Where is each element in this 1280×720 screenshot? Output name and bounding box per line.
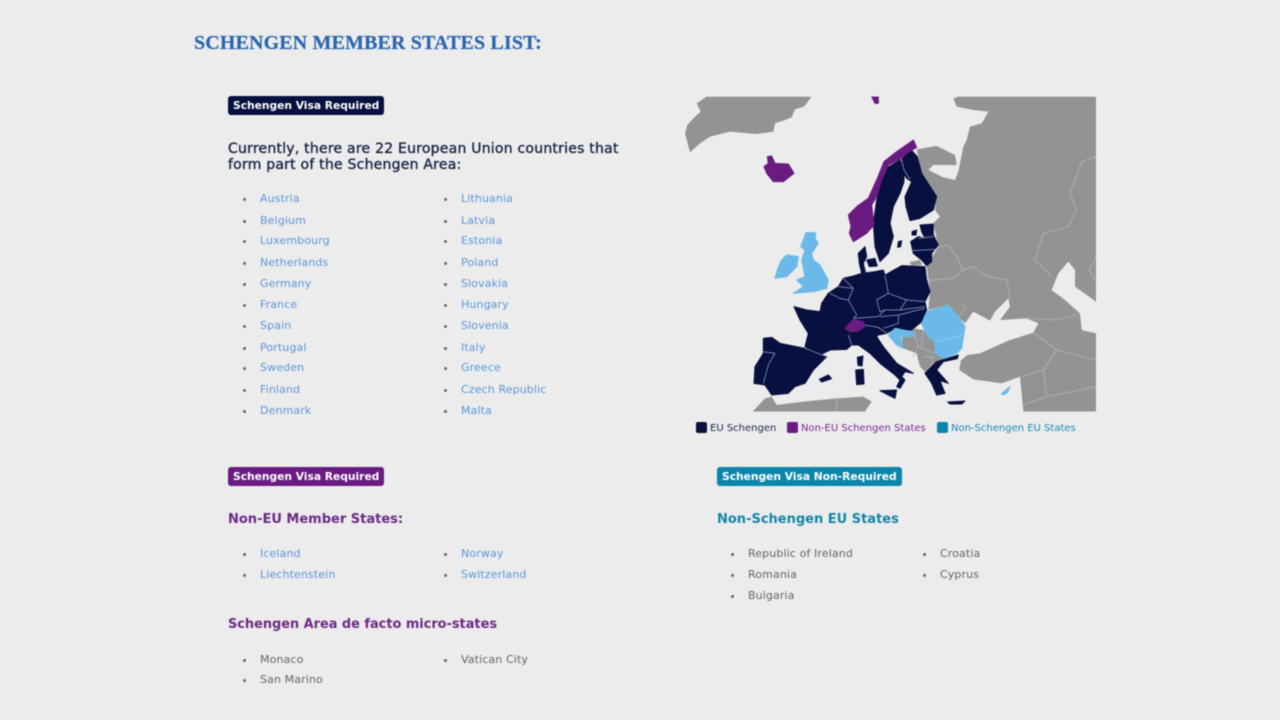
Iceland [764, 156, 794, 182]
Denmark [858, 247, 867, 273]
badge: Schengen Visa Non-Required [717, 467, 902, 486]
legend item: Non-Schengen EU States: Non-Schengen EU States [951, 422, 1076, 434]
heading: Non-EU Member States: Non-EU Member States: [228, 512, 403, 527]
list: second column of EU countries: Czech Republic [461, 382, 546, 396]
heading: 22 EU countries: Currently, there are 22 European Union countries that [228, 141, 619, 157]
Sardinia and Corsica [856, 356, 864, 385]
legend item: EU Schengen [695, 421, 776, 434]
Caspian Sea [1052, 262, 1096, 333]
Ireland [775, 255, 798, 278]
Baltic states [911, 224, 938, 266]
list: second column of EU countries: Latvia [461, 214, 495, 226]
list: first column micro-states: Monaco [260, 652, 303, 666]
list: first column micro-states: San Marino [260, 672, 323, 686]
list: first column micro-states [242, 652, 323, 686]
Sweden [873, 160, 904, 262]
list: second column of EU countries: Slovakia [461, 276, 508, 290]
EU Schengen countries [754, 149, 965, 404]
Finland [902, 149, 937, 221]
list: second column of EU countries: Malta [461, 404, 492, 416]
list: first column of EU countries: Finland [260, 382, 300, 396]
list: first column of EU countries: Luxembourg [260, 234, 330, 246]
Crete [948, 401, 965, 404]
list: second column micro-states: Vatican City [461, 652, 528, 666]
list: first column of EU countries: Sweden [260, 360, 304, 374]
list: second column non-Schengen: Cyprus [940, 568, 979, 580]
list: first column non-EU: Liechtenstein [260, 568, 335, 580]
list: first column non-Schengen: Bulgaria [748, 588, 795, 602]
list: second column of EU countries [444, 192, 546, 416]
list: first column of EU countries: Austria [260, 192, 300, 204]
legend [695, 421, 1076, 434]
grey land borders [837, 157, 1096, 412]
legend item: EU Schengen: EU Schengen [710, 422, 776, 434]
list: first column non-EU [242, 546, 336, 580]
list: first column of EU countries: Netherlands [260, 256, 328, 268]
Greece [925, 355, 958, 395]
legend item: Non-EU Schengen States: Non-EU Schengen States [801, 422, 926, 434]
Non-Schengen EU states [775, 233, 1010, 395]
list: first column non-Schengen: Republic of Ireland [748, 546, 853, 560]
list: first column of EU countries: Denmark [260, 404, 311, 416]
panel: Non-Schengen EU states [716, 466, 980, 602]
list: first column of EU countries: France [260, 298, 297, 310]
list: first column of EU countries [242, 192, 330, 416]
list: second column non-EU: Switzerland [461, 568, 526, 580]
panel: EU Schengen countries [227, 95, 619, 416]
list: second column of EU countries: Hungary [461, 298, 509, 310]
Norway [848, 140, 917, 242]
list: second column non-Schengen [922, 546, 980, 581]
Romania-Bulgaria border [935, 335, 963, 342]
Kaliningrad [909, 260, 922, 266]
list: first column of EU countries: Belgium [260, 214, 306, 226]
panel: Non-EU member states [227, 466, 528, 686]
badge: Schengen Visa Required (navy): Schengen Visa Required [233, 99, 379, 112]
Cyprus [1002, 387, 1010, 395]
Spain and Portugal [754, 337, 827, 395]
list: second column non-EU: Norway [461, 546, 503, 560]
map of Europe [684, 96, 1096, 412]
heading: micro-states: Schengen Area de facto micro-states [228, 617, 497, 632]
Croatia [888, 328, 915, 348]
list: second column non-EU [444, 546, 526, 580]
list: first column of EU countries: Portugal [260, 340, 307, 354]
Gotland and Baltic islands [898, 230, 917, 247]
list: second column of EU countries: Slovenia [461, 318, 509, 332]
heading: Non-Schengen EU States: Non-Schengen EU States [717, 512, 899, 527]
list: first column of EU countries: Spain [260, 318, 291, 332]
list: second column of EU countries: Greece [461, 360, 501, 374]
list: second column non-Schengen: Croatia [940, 546, 980, 560]
eastern Europe, Turkey and Russia land [917, 97, 1096, 412]
list: first column non-Schengen [730, 546, 853, 602]
Balearic islands [819, 375, 832, 382]
list: first column non-Schengen: Romania [748, 568, 797, 580]
Svalbard [872, 97, 878, 103]
badge: Schengen Visa Required (navy) [228, 96, 384, 115]
country borders [763, 160, 935, 383]
Danish islands [867, 258, 877, 267]
list: first column of EU countries: Germany [260, 276, 311, 290]
badge: Schengen Visa Required (purple): Schengen Visa Required [233, 470, 379, 483]
heading: 22 EU countries: form part of the Schengen Area: [228, 157, 461, 173]
heading: 22 EU countries [227, 141, 619, 173]
badge: Schengen Visa Non-Required: Schengen Visa Non-Required [722, 470, 897, 483]
badge: Schengen Visa Required (purple) [228, 467, 384, 486]
Great Britain [793, 233, 828, 293]
Balkan land [902, 328, 945, 373]
list: second column of EU countries: Italy [461, 340, 485, 354]
list: second column of EU countries: Estonia [461, 234, 502, 246]
Sicily [880, 390, 897, 398]
list: second column of EU countries: Lithuania [461, 192, 513, 204]
Continental mass: France, Benelux, Germany, Poland, Czechia, Austria, Slovakia, Hungary, Slovenia, Italy [794, 266, 930, 388]
Non-EU Schengen states [764, 97, 917, 332]
Switzerland [845, 319, 865, 332]
list: first column non-EU: Iceland [260, 546, 301, 560]
title: SCHENGEN MEMBER STATES LIST: [194, 32, 542, 54]
list: second column of EU countries: Poland [461, 256, 498, 268]
North Africa land [753, 397, 872, 412]
Greenland [685, 97, 812, 152]
Romania and Bulgaria [922, 305, 965, 358]
